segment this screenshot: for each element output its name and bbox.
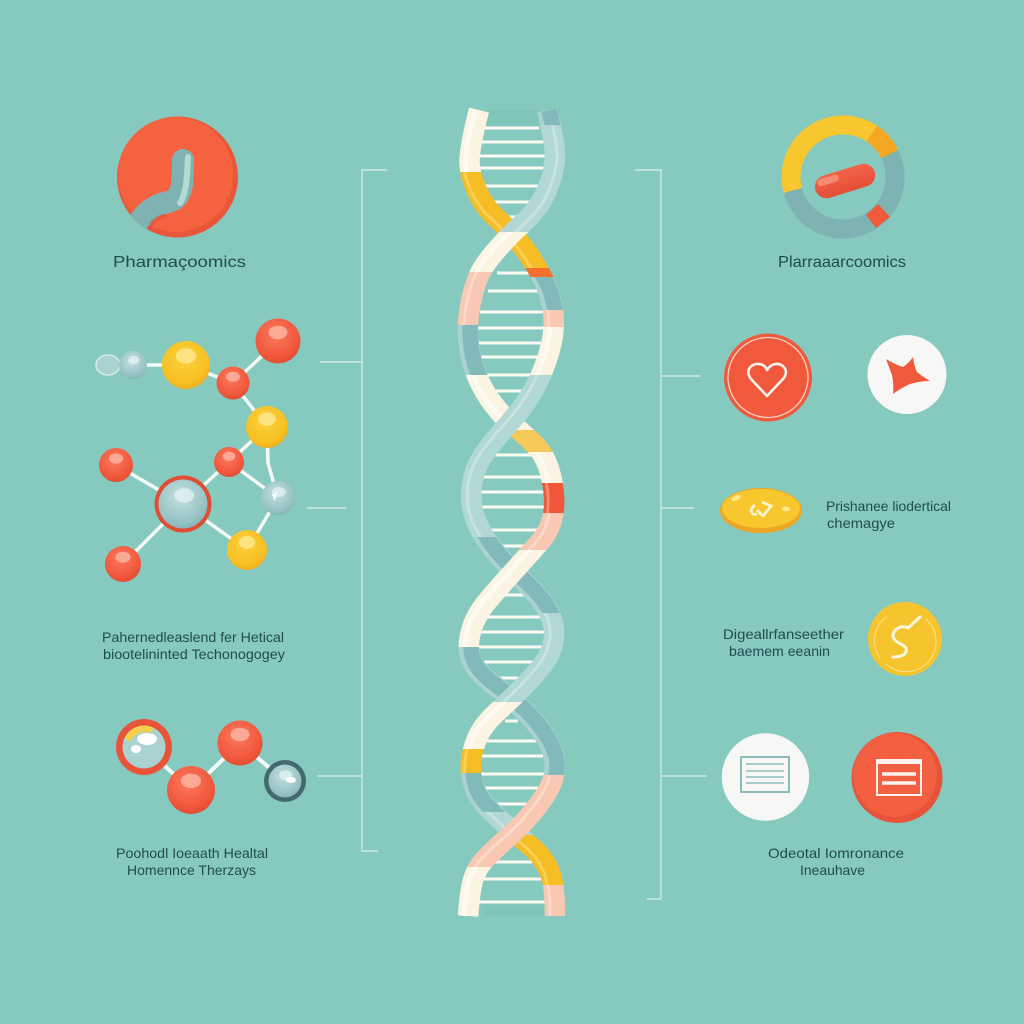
- molecule bonds: [144, 743, 285, 790]
- molecule diagram: upper left: [96, 318, 300, 582]
- yellow atom: [227, 530, 267, 570]
- molecule diagram: lower left: [116, 719, 306, 814]
- text block: right lower: [723, 626, 844, 659]
- heading: right top label: Plarraaarcoomics: [778, 254, 906, 271]
- red atom: [105, 546, 141, 582]
- molecule bonds: [116, 341, 278, 564]
- helix strand middle layer: [462, 110, 557, 916]
- icon: heart circle: [724, 334, 812, 422]
- icon: yellow pill coin: [720, 488, 802, 533]
- right bracket connector: [635, 170, 707, 899]
- icon: yellow S circle: [868, 602, 942, 676]
- red atom: [256, 318, 300, 364]
- text block: right middle: [826, 498, 951, 531]
- text block: right middle: chemagye: [827, 515, 895, 531]
- helix rungs: [477, 110, 546, 916]
- text block: right lower: Digeallrfanseether: [723, 626, 844, 642]
- teal atom small: [119, 351, 147, 379]
- red atom: [167, 766, 215, 814]
- left bracket connector: [307, 170, 387, 851]
- helix strand lower layer: [463, 110, 557, 916]
- icon: red document circle: [852, 732, 942, 823]
- heading: left top label: Pharmaçoomics: [113, 254, 246, 271]
- red atom: [214, 447, 244, 477]
- large ringed atom: [154, 476, 212, 532]
- text block: left bottom: Poohodl Ioeaath Healtal: [116, 845, 268, 861]
- red atom: [218, 720, 262, 766]
- capsule: [812, 161, 878, 201]
- infographic canvas: [95, 108, 950, 917]
- dark ringed atom: [264, 760, 306, 802]
- text block: right bottom: Ineauhave: [800, 862, 865, 878]
- icon: white document circle: [722, 733, 809, 821]
- icon: red circle with tube: [117, 116, 238, 238]
- helix strand upper layer: [460, 330, 564, 770]
- text block: right bottom: [768, 845, 904, 878]
- ringed atom: [116, 719, 172, 775]
- red atom: [216, 366, 250, 400]
- glass atom small: [96, 355, 120, 375]
- icon: gauge ring with capsule: [791, 125, 895, 229]
- yellow atom: [162, 341, 210, 389]
- icon: star circle: [868, 335, 946, 414]
- text block: right lower: baemem eeanin: [729, 643, 830, 659]
- text block: left middle: Pahernedleaslend fer Hetical: [102, 629, 284, 645]
- text block: left middle: biootelininted Techonogogey: [103, 646, 285, 662]
- text block: left middle: [102, 629, 285, 662]
- text block: left bottom: [116, 845, 268, 878]
- text block: left bottom: Homennce Therzays: [127, 862, 256, 878]
- DNA double helix: [462, 110, 557, 916]
- text block: right middle: Prishanee liodertical: [826, 498, 951, 514]
- yellow atom: [246, 406, 288, 448]
- glass atom: [261, 481, 295, 515]
- red atom: [99, 448, 133, 482]
- text block: right bottom: Odeotal Iomronance: [768, 845, 904, 861]
